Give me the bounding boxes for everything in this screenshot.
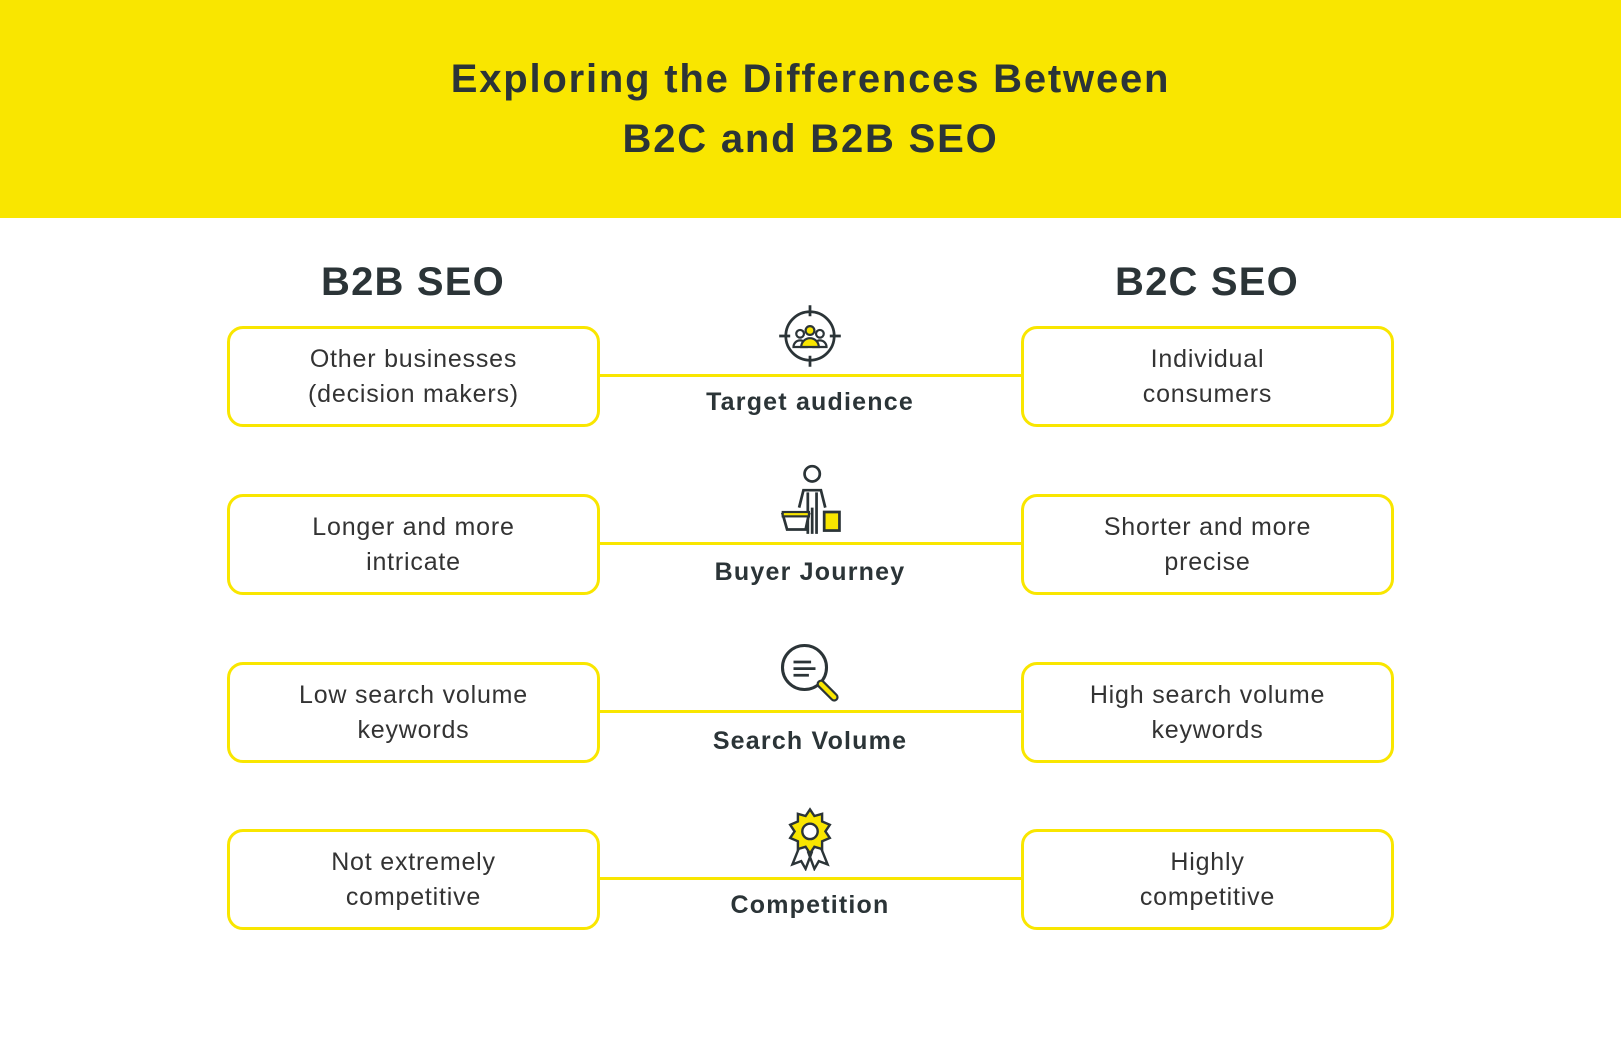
heading: B2B SEO: B2B SEO <box>321 260 505 304</box>
title: B2C and B2B SEO <box>623 117 998 161</box>
box: B2B target: Other businesses <box>310 344 517 372</box>
title <box>451 57 1170 161</box>
icon: award <box>788 807 832 871</box>
box: B2B competition <box>227 829 600 930</box>
box: B2B journey: intricate <box>366 548 461 576</box>
row: buyer journey <box>227 464 1394 595</box>
box: B2B journey: Longer and more <box>312 512 515 540</box>
box: B2C volume: High search volume <box>1090 680 1325 708</box>
heading: B2C SEO: B2C SEO <box>1115 260 1299 304</box>
box: B2C target <box>1021 326 1394 427</box>
box: B2C journey: Shorter and more <box>1104 512 1311 540</box>
box: B2C volume <box>1021 662 1394 763</box>
title: Exploring the Differences Between <box>451 57 1170 101</box>
box: B2C target: Individual <box>1151 344 1264 372</box>
box: B2C competition: Highly <box>1170 848 1245 876</box>
box: B2C competition: competitive <box>1140 882 1275 910</box>
label: target audience: Target audience <box>706 388 914 416</box>
box: B2B competition: competitive <box>346 882 481 910</box>
box: B2B target <box>227 326 600 427</box>
row: search volume <box>227 644 1394 763</box>
icon: magnifier <box>780 644 839 702</box>
icon: target audience <box>779 305 841 367</box>
box: B2B volume <box>227 662 600 763</box>
header banner <box>0 0 1621 218</box>
box: B2B volume: Low search volume <box>299 680 528 708</box>
icon: shopper <box>781 464 841 534</box>
box: B2C journey: precise <box>1164 548 1251 576</box>
row: competition <box>227 807 1394 930</box>
box: B2B journey <box>227 494 600 595</box>
box: B2B competition: Not extremely <box>331 848 496 876</box>
row: target audience <box>227 305 1394 427</box>
box: B2C competition <box>1021 829 1394 930</box>
box: B2B target: (decision makers) <box>308 380 519 408</box>
box: B2C target: consumers <box>1143 380 1272 408</box>
label: competition: Competition <box>730 891 890 919</box>
label: search volume: Search Volume <box>713 727 907 755</box>
box: B2B volume: keywords <box>357 716 469 744</box>
box: B2C volume: keywords <box>1152 716 1264 744</box>
label: buyer journey: Buyer Journey <box>715 558 905 586</box>
box: B2C journey <box>1021 494 1394 595</box>
